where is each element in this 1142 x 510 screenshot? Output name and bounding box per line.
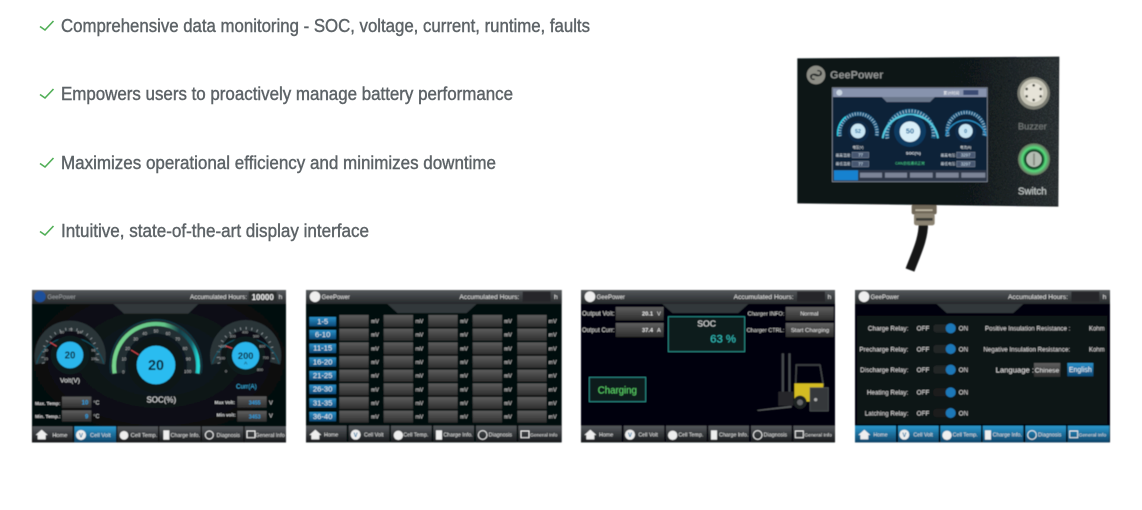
navigation bar: Charge Info.: [443, 433, 473, 439]
screen: cell voltage: [306, 290, 562, 442]
row 31-35: 31-35: [313, 398, 332, 407]
current gauge: [212, 325, 279, 390]
language selector: Chinese: [1035, 367, 1060, 374]
precharge relay: Precharge Relay:: [859, 346, 909, 353]
switch: Switch: [1018, 187, 1047, 198]
navigation bar: General Info: [530, 433, 558, 439]
volt gauge: 72: [69, 328, 73, 332]
voltage readouts: V: [269, 414, 273, 420]
output readouts: Output Curr:: [582, 328, 615, 334]
voltage readouts: [215, 396, 273, 422]
switch: [1018, 143, 1050, 198]
header: GeePower: [597, 295, 625, 301]
row 26-30: 26-30: [313, 385, 332, 394]
row 26-30: mV: [549, 387, 557, 393]
row 36-40: mV: [549, 415, 557, 421]
charger controls: Normal: [800, 311, 818, 317]
row 26-30: mV: [371, 387, 379, 393]
SOC gauge: 20: [148, 358, 164, 374]
screen: home gauges: [32, 290, 286, 442]
header: h: [828, 294, 832, 301]
header: [581, 290, 835, 313]
temperature readouts: 10: [82, 401, 89, 407]
row 31-35: mV: [549, 401, 557, 407]
output readouts: [582, 307, 664, 337]
charge relay: [868, 323, 969, 333]
navigation bar: Charge Info.: [171, 433, 200, 439]
header: Accumulated Hours:: [190, 294, 247, 301]
row 1-5: mV: [371, 319, 379, 325]
row 21-25: mV: [549, 374, 557, 380]
output readouts: V: [657, 311, 661, 317]
navigation bar: General Info: [804, 433, 832, 439]
heating relay: Heating Relay:: [867, 390, 909, 397]
row 1-5: 1-5: [317, 317, 328, 326]
row 31-35: mV: [371, 401, 379, 407]
screen: relays and settings: [855, 290, 1110, 442]
forklift: [757, 353, 828, 411]
row 21-25: [309, 370, 557, 382]
header: Accumulated Hours:: [734, 294, 794, 301]
current gauge: 400: [242, 331, 248, 335]
row 11-15: [309, 342, 557, 354]
SOC gauge: [110, 320, 202, 405]
current gauge: 200: [220, 344, 226, 348]
voltage readouts: 3455: [249, 401, 261, 407]
discharge relay: ON: [959, 367, 969, 374]
feature: display interface: Intuitive, state-of-the-art display interface: [61, 221, 369, 241]
volt gauge: 84: [77, 330, 81, 334]
row 26-30: mV: [415, 387, 424, 393]
row 11-15: mV: [371, 346, 379, 352]
row 1-5: mV: [549, 319, 557, 325]
row 26-30: [309, 383, 557, 395]
charge relay: OFF: [917, 326, 929, 333]
navigation bar: Cell Volt: [90, 433, 111, 439]
navigation bar: V: [902, 433, 906, 439]
charging status: Charging: [598, 386, 637, 397]
row 6-10: mV: [415, 333, 424, 339]
row 16-20: mV: [504, 360, 512, 366]
row 11-15: mV: [549, 346, 557, 352]
volt gauge: 60: [60, 330, 64, 334]
row 6-10: mV: [549, 333, 557, 339]
row 6-10: [309, 329, 557, 341]
output readouts: 20.1: [642, 311, 653, 317]
display readouts: [836, 144, 975, 167]
SOC gauge: 20: [125, 346, 131, 351]
current gauge: Curr(A): [236, 383, 257, 390]
row 21-25: mV: [415, 374, 424, 380]
row 26-30: mV: [504, 387, 512, 393]
SOC panel: 63 %: [710, 333, 736, 345]
current gauge: 500: [253, 334, 259, 338]
row 11-15: mV: [504, 346, 512, 352]
row 1-5: mV: [415, 319, 424, 325]
current gauge: 300: [230, 335, 236, 339]
output readouts: A: [657, 328, 661, 334]
volt gauge: [37, 326, 104, 385]
row 6-10: mV: [504, 333, 512, 339]
insulation resistance: Kohm: [1089, 347, 1105, 353]
navigation bar: Cell Temp.: [953, 433, 978, 439]
navigation bar: Home: [52, 433, 67, 439]
row 36-40: mV: [460, 415, 468, 421]
navigation bar: Cell Volt: [638, 433, 658, 439]
charger controls: Start Charging: [791, 328, 829, 334]
header: [306, 290, 562, 313]
navigation bar: Diagnosis: [217, 433, 240, 439]
charger controls: Charger CTRL:: [747, 328, 785, 334]
display gauges: 50: [906, 126, 914, 135]
display readouts: 电压(V): [852, 144, 864, 149]
voltage readouts: Max Volt:: [215, 400, 235, 405]
navigation bar: [581, 426, 835, 442]
display gauges: 52: [855, 129, 861, 135]
SOC gauge: 80: [183, 346, 188, 351]
volt gauge: 15: [44, 357, 48, 361]
buzzer: [1017, 77, 1050, 132]
row 11-15: mV: [460, 346, 468, 352]
navigation bar: Cell Temp.: [678, 433, 703, 439]
current gauge: 700: [263, 356, 269, 360]
header: h: [1103, 294, 1107, 301]
voltage readouts: V: [269, 400, 273, 406]
row 11-15: mV: [415, 346, 424, 352]
header: 10000: [252, 293, 274, 302]
temperature readouts: Max. Temp:: [35, 401, 61, 406]
header: [32, 290, 286, 314]
SOC gauge: 10: [122, 357, 127, 362]
logo: [807, 66, 883, 84]
display readouts: 最高电压:: [941, 152, 956, 157]
row 16-20: mV: [549, 360, 557, 366]
logo: GeePower: [830, 70, 883, 82]
display readouts: 最高温度:: [836, 152, 851, 157]
navigation bar: Home: [324, 433, 338, 439]
latching relay: Latching Relay:: [865, 410, 909, 417]
language selector: Language :: [996, 365, 1034, 374]
header: h: [554, 294, 558, 301]
navigation bar: Home: [873, 433, 888, 439]
row 21-25: mV: [460, 374, 468, 380]
discharge relay: OFF: [917, 367, 929, 374]
header: Accumulated Hours:: [459, 294, 519, 301]
header: Accumulated Hours:: [1008, 294, 1068, 301]
current gauge: 200: [238, 351, 253, 361]
row 16-20: mV: [460, 360, 468, 366]
row 16-20: mV: [415, 360, 424, 366]
row 26-30: mV: [460, 387, 468, 393]
header: GeePower: [871, 295, 899, 301]
row 36-40: mV: [371, 415, 379, 421]
row 36-40: 36-40: [313, 412, 332, 421]
current gauge: 600: [259, 344, 265, 348]
SOC gauge: 100: [184, 369, 192, 374]
display gauges: 0: [964, 129, 967, 135]
temperature readouts: °C: [93, 400, 99, 406]
display readouts: 77: [858, 153, 864, 158]
discharge relay: [860, 365, 969, 375]
volt gauge: 100: [91, 357, 97, 361]
display readouts: 77: [858, 162, 864, 167]
row 1-5: mV: [504, 319, 512, 325]
row 16-20: 16-20: [313, 357, 332, 366]
output readouts: 37.4: [642, 328, 654, 334]
row 31-35: [309, 397, 557, 409]
navigation bar: Home: [599, 433, 613, 439]
row 16-20: [309, 356, 557, 368]
volt gauge: Volt(V): [60, 378, 80, 385]
row 11-15: 11-15: [313, 344, 332, 353]
discharge relay: Discharge Relay:: [860, 367, 909, 374]
feature: data monitoring: Comprehensive data monitoring - SOC, voltage, current, runtime, faults: [61, 16, 590, 36]
temperature readouts: °C: [93, 414, 99, 420]
SOC gauge: 0: [122, 369, 125, 374]
navigation bar: [855, 426, 1109, 442]
display readouts: 3297: [961, 162, 971, 167]
heating relay: ON: [959, 390, 969, 397]
volt gauge: 20: [65, 350, 75, 361]
heating relay: OFF: [917, 390, 929, 397]
display gauges: [838, 111, 986, 147]
cable: [910, 222, 923, 270]
navigation bar: [306, 426, 561, 442]
volt gauge: 30: [44, 349, 48, 353]
voltage readouts: Min volt:: [217, 412, 236, 417]
row 1-5: mV: [460, 319, 468, 325]
header: h: [279, 294, 283, 301]
precharge relay: [859, 344, 969, 354]
charging status: [589, 377, 646, 402]
row 6-10: mV: [371, 333, 379, 339]
display screen: 累计时间: [943, 89, 959, 95]
heating relay: [867, 387, 969, 397]
display readouts: 最低电压:: [941, 161, 956, 166]
SOC gauge: 70: [175, 337, 181, 342]
latching relay: [865, 408, 969, 418]
device photo: [797, 57, 1059, 270]
navigation bar: V: [628, 433, 632, 439]
language selector: English: [1069, 367, 1092, 374]
relay switches: [859, 323, 969, 418]
row 36-40: mV: [504, 415, 512, 421]
navigation bar: Charge Info.: [993, 433, 1022, 439]
navigation bar: General Info: [1079, 433, 1106, 439]
navigation bar: Cell Temp.: [403, 433, 428, 439]
row 21-25: mV: [371, 374, 379, 380]
current gauge: 800: [257, 368, 263, 372]
SOC gauge: 40: [142, 331, 148, 336]
header: GeePower: [47, 295, 76, 301]
precharge relay: ON: [959, 346, 969, 353]
feature: operational efficiency: Maximizes operational efficiency and minimizes downtime: [61, 153, 496, 173]
cell voltage table: [309, 315, 557, 423]
insulation resistance: [983, 327, 1105, 353]
navigation bar: Diagnosis: [489, 433, 512, 439]
SOC panel: [668, 317, 745, 352]
navigation bar: Charge Info.: [719, 433, 748, 439]
navigation bar: [32, 426, 286, 442]
buzzer: Buzzer: [1018, 122, 1047, 132]
navigation bar: Diagnosis: [1038, 433, 1062, 439]
navigation bar: Cell Volt: [364, 433, 384, 439]
display readouts: 最低温度:: [836, 161, 851, 166]
navigation bar: V: [79, 433, 83, 439]
display readouts: 电流(A): [960, 144, 971, 149]
output readouts: Output Volt:: [582, 311, 615, 317]
current gauge: A: [244, 360, 248, 366]
precharge relay: OFF: [917, 346, 929, 353]
row 6-10: 6-10: [315, 330, 330, 339]
current gauge: 100: [219, 357, 225, 361]
feature: battery performance: Empowers users to proactively manage battery performance: [61, 84, 513, 104]
row 31-35: mV: [504, 401, 512, 407]
header: GeePower: [322, 295, 350, 301]
SOC gauge: 50: [154, 328, 159, 333]
charge relay: Charge Relay:: [868, 326, 909, 333]
enclosure: [797, 57, 1059, 207]
display screen: [832, 88, 987, 182]
charge relay: ON: [959, 326, 969, 333]
row 36-40: mV: [415, 415, 424, 421]
screen: charge info: [581, 290, 835, 442]
language selector: [996, 363, 1093, 377]
current gauge: 0: [225, 369, 227, 373]
navigation bar: General Info: [255, 433, 285, 439]
display readouts: CAN总线通讯正常: [895, 161, 925, 166]
SOC gauge: 90: [186, 356, 191, 361]
header: [855, 290, 1110, 313]
display readouts: SOC(%): [906, 151, 921, 156]
navigation bar: Cell Volt: [913, 433, 933, 439]
volt gauge: 96: [91, 349, 95, 353]
navigation bar: Cell Temp.: [131, 433, 158, 439]
temperature readouts: 9: [85, 414, 89, 420]
latching relay: ON: [959, 410, 969, 417]
display readouts: 3297: [961, 153, 971, 158]
SOC gauge: 30: [133, 336, 139, 341]
SOC gauge: SOC(%): [146, 396, 177, 405]
voltage readouts: 3453: [249, 414, 261, 420]
insulation resistance: Negative Insulation Resistance:: [983, 347, 1070, 353]
row 31-35: mV: [460, 401, 468, 407]
row 21-25: mV: [504, 374, 512, 380]
latching relay: OFF: [917, 410, 929, 417]
row 16-20: mV: [371, 360, 379, 366]
temperature readouts: Min. Temp.:: [35, 414, 61, 419]
temperature readouts: [35, 397, 99, 422]
row 31-35: mV: [415, 401, 424, 407]
insulation resistance: Positive Insulation Resistance :: [985, 327, 1071, 333]
feature list: [40, 16, 590, 241]
display nav: [833, 170, 987, 181]
row 1-5: [309, 315, 557, 327]
navigation bar: V: [354, 433, 358, 439]
charger controls: [747, 307, 834, 337]
SOC gauge: 60: [166, 331, 171, 336]
cable gland: [912, 204, 937, 225]
navigation bar: Diagnosis: [764, 433, 787, 439]
SOC panel: SOC: [697, 318, 716, 328]
row 21-25: 21-25: [313, 371, 332, 380]
row 6-10: mV: [460, 333, 468, 339]
charger controls: Charger INFO:: [748, 312, 785, 318]
insulation resistance: Kohm: [1089, 327, 1105, 333]
row 36-40: [309, 411, 557, 423]
